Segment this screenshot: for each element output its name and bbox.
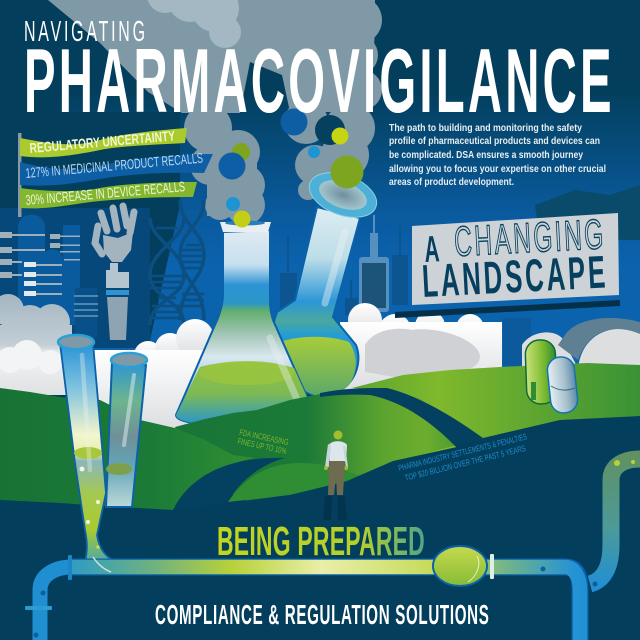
bubbles xyxy=(218,108,364,228)
dark left sky xyxy=(0,0,180,340)
clouds: left group xyxy=(0,294,72,395)
text: FDA note xyxy=(237,427,290,456)
intro text: be complicated. DSA ensures a smooth journey xyxy=(389,149,583,161)
intro text xyxy=(389,122,606,188)
icon: background bottle xyxy=(359,215,389,312)
hill: main green xyxy=(175,388,483,502)
flask: tilted flask xyxy=(273,164,383,396)
pipe bulb xyxy=(433,546,487,586)
clouds: right xyxy=(340,303,502,392)
text: settlements note: TOP $20 BILLION OVER THE PAST 5 YEARS xyxy=(404,443,527,483)
text: settlements note xyxy=(397,431,531,484)
clouds: far right xyxy=(522,329,640,368)
road lower xyxy=(173,458,285,512)
clouds: white tops xyxy=(0,340,62,374)
text: FDA note: FDA INCREASING xyxy=(239,427,290,447)
pipe: outline xyxy=(72,567,580,640)
icon: DNA helix xyxy=(148,200,204,325)
main flask rim xyxy=(220,222,271,232)
title: PHARMACOVIGILANCE xyxy=(24,30,612,132)
tilted flask liquid xyxy=(280,337,356,396)
banner flag: 30% INCREASE IN DEVICE RECALLS xyxy=(25,178,186,208)
skyline left xyxy=(18,214,97,338)
flask: main flask xyxy=(176,220,307,425)
intro text: The path to building and monitoring the safety xyxy=(389,122,582,134)
hill: dark foreground lip xyxy=(0,416,640,520)
text: settlements note: PHARMA INDUSTRY SETTLEMENTS & PENALTIES xyxy=(397,431,528,473)
ribbon: product recalls xyxy=(20,154,213,186)
billboard xyxy=(395,212,620,318)
tilted flask rim xyxy=(303,164,383,226)
pipe: horizontal run xyxy=(72,567,580,640)
sky gradient xyxy=(0,95,640,380)
hill: lower hump xyxy=(228,463,360,502)
ribbon: regulatory xyxy=(20,128,187,157)
smoke: column left xyxy=(184,104,265,225)
server bars left xyxy=(0,232,98,317)
smoke: column right xyxy=(284,100,375,205)
banner flag: 127% IN MEDICINAL PRODUCT RECALLS xyxy=(25,150,204,181)
intro text: areas of product development. xyxy=(389,176,514,188)
dim left sky xyxy=(0,208,150,348)
billboard: A xyxy=(423,229,440,271)
billboard base xyxy=(395,300,620,318)
smoke: light puff xyxy=(147,0,241,48)
main flask liquid xyxy=(176,362,307,425)
billboard panel xyxy=(412,213,619,305)
pipe: elbow highlight xyxy=(93,557,111,572)
pipe joints xyxy=(25,460,635,638)
smoke: top band xyxy=(48,0,382,113)
gear silhouette behind billboard xyxy=(535,185,640,240)
background towers xyxy=(280,225,408,315)
clouds: centre group xyxy=(93,319,218,432)
banner flag: REGULATORY UNCERTAINTY xyxy=(29,127,176,156)
hill: left xyxy=(0,388,255,510)
billboard posts xyxy=(503,318,531,366)
ribbon: device recalls xyxy=(20,182,197,208)
test tube: front joined to pipe xyxy=(58,335,118,562)
gear xyxy=(558,318,640,360)
person xyxy=(323,430,348,520)
hill: back right xyxy=(352,363,640,470)
pipe: right riser xyxy=(590,459,640,584)
text: FDA note: FINES UP TO 10% xyxy=(237,436,288,456)
billboard: CHANGING xyxy=(453,212,604,266)
icon: robotic hand xyxy=(95,206,134,340)
billboard: LANDSCAPE xyxy=(421,246,606,307)
intro text: profile of pharmaceutical products and devices can xyxy=(389,135,600,147)
heading: being prepared: BEING PREPARED xyxy=(217,519,425,565)
pipe: left vertical xyxy=(40,567,72,640)
road upper xyxy=(320,388,483,448)
banner flag xyxy=(18,127,213,217)
flag pole xyxy=(18,133,22,217)
pipes xyxy=(40,459,640,640)
clouds: right shade xyxy=(365,329,480,378)
test tube: back xyxy=(106,353,147,507)
heading: compliance: COMPLIANCE & REGULATION SOLUTIONS xyxy=(155,599,489,630)
title: NAVIGATING xyxy=(24,15,145,47)
capsules xyxy=(525,339,579,414)
